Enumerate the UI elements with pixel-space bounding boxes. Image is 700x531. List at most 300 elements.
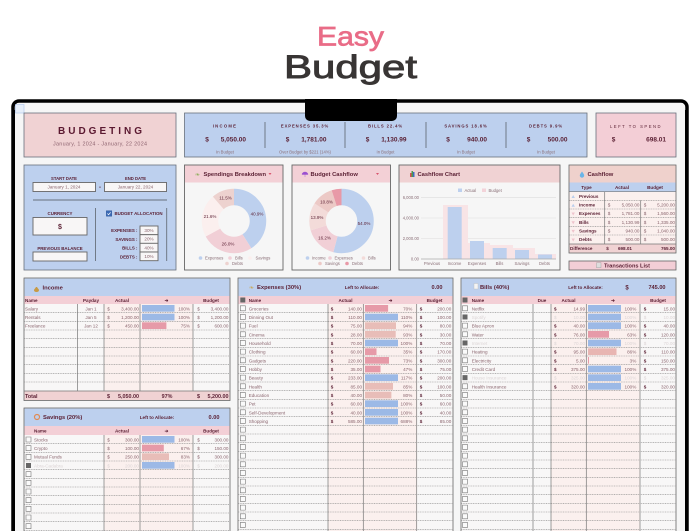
row: Dinning Out: 100.00 [437, 315, 452, 320]
total row: 5,050.00 [118, 394, 139, 400]
KPI: income: $ [205, 136, 209, 144]
KPI: debts: DEBTS 9.9% [529, 124, 563, 128]
row labels: Bills [579, 220, 589, 225]
row: Heating [472, 348, 675, 355]
row: Hobby: 75.00 [440, 367, 452, 372]
actual bars [448, 207, 552, 259]
legend [306, 256, 376, 266]
row: Freelance: 600.00 [214, 324, 229, 329]
column headers: Name [472, 298, 485, 303]
budget values: $ [644, 237, 647, 242]
actual values [608, 202, 640, 242]
row: Household: 70.00 [440, 341, 452, 346]
donut labels [311, 200, 370, 240]
row: Clothing: 35% [403, 350, 412, 355]
row: Salary: 3,400.00 [211, 306, 229, 311]
row: Health Insurance: 100% [625, 384, 636, 389]
row: Fuel: 80.00 [440, 324, 452, 329]
x axis [424, 261, 550, 266]
y axis: 0.00 [411, 256, 420, 262]
row: Heating: $ [644, 350, 647, 355]
panel: left to spend [596, 113, 676, 157]
column headers: ➔ [389, 298, 394, 303]
row: Stocks: $ [197, 437, 200, 442]
row: Water: $ [644, 332, 647, 337]
actual values: 940.00 [625, 228, 640, 234]
row: Mutual Funds: 250.00 [125, 455, 139, 460]
difference row: 698.01 [618, 246, 632, 251]
row: Health: $ [420, 384, 423, 389]
row: completed savings item: $ [197, 463, 200, 468]
legend: Bills [368, 256, 376, 260]
row: Groceries: Groceries [249, 306, 269, 311]
row: Hobby [249, 366, 452, 372]
actual values: 1,130.99 [622, 220, 640, 225]
row: Cinema: Cinema [249, 332, 265, 337]
column headers: ➔ [165, 298, 170, 303]
budget allocation: 10% [144, 254, 154, 259]
actual values: 500.00 [625, 237, 640, 242]
column headers [25, 298, 219, 303]
row: Fuel: 75.00 [350, 324, 362, 329]
table: expenses: Expenses (30%) [257, 285, 301, 291]
KPI: expenses: $ [286, 136, 290, 144]
KPI: income: INCOME [213, 124, 237, 128]
total row: 97% [162, 394, 173, 400]
KPI: expenses: 1,781.00 [301, 136, 327, 144]
row: Rentals: $ [107, 315, 110, 320]
row: Freelance [25, 322, 229, 329]
row: Health: 100.00 [437, 384, 452, 389]
row labels: Expenses [579, 211, 601, 216]
row: Household: Household [249, 341, 271, 346]
panel: spendings breakdown [184, 165, 283, 270]
row: Spotify (done): 10.00 [664, 315, 675, 320]
icon: money bag [34, 287, 39, 292]
panel: cashflow chart [399, 165, 560, 270]
row: Heating: 95.00 [574, 350, 585, 355]
y axis: 4,000.00 [403, 216, 420, 220]
row: Spotify (done): 100% [625, 315, 636, 320]
row: Gadgets: $ [420, 358, 423, 363]
row: Internet (done): $ [554, 341, 557, 346]
KPI: income: 5,050.00 [221, 136, 246, 144]
donut labels: 26.0% [222, 242, 234, 246]
row: Gadgets: $ [331, 358, 334, 363]
row: Hobby: Hobby [249, 367, 263, 372]
row: Dinning Out: 110.00 [348, 315, 362, 320]
budget values: $ [644, 228, 647, 234]
row: Electricity: $ [554, 358, 557, 363]
row: Credit Card: 100% [625, 367, 636, 372]
row: Stocks: Stocks [34, 437, 48, 442]
row: Blue Apron: 100% [625, 324, 636, 329]
column headers: ➔ [611, 298, 616, 303]
column headers: Actual [615, 185, 629, 190]
column headers: Actual [115, 429, 129, 434]
table: bills: 745.00 [648, 285, 666, 291]
row: Credit Card: $ [644, 367, 647, 372]
row: Crypto: $ [107, 446, 110, 451]
budget values: $ [644, 211, 647, 216]
row: Electricity: 5.00 [576, 358, 585, 363]
KPI: savings: SAVINGS 18.6% [444, 124, 488, 128]
row: Pet: 60.00 [350, 402, 362, 407]
row: Shopping: 585.00 [348, 419, 362, 424]
column headers: Budget [427, 298, 443, 303]
row: Netflix: 14.99 [574, 306, 585, 311]
row: Internet (done): 70.00 [574, 341, 585, 346]
row: Gadgets: 73% [403, 358, 412, 363]
row labels: Previous [579, 194, 599, 199]
KPI: bills: In Budget [377, 150, 395, 154]
row: Gadgets [249, 357, 452, 364]
row: Shopping: $ [420, 419, 423, 424]
table: savings: 0.00 [209, 415, 219, 421]
row: Internet (done): 100% [625, 341, 636, 346]
row: Netflix: Netflix [472, 306, 485, 311]
column headers: Payday [83, 298, 99, 303]
row: Clothing: 60.00 [350, 350, 362, 355]
row: Self-Development: 40.00 [350, 410, 362, 415]
difference row: Difference [570, 246, 593, 251]
row: Health: Health [249, 384, 262, 389]
row: Groceries [249, 305, 452, 312]
button: transactions list: Transactions List [604, 264, 650, 270]
donut labels [204, 196, 263, 246]
row: Mutual Funds: 300.00 [214, 455, 229, 460]
row: Mutual Funds: Mutual Funds [34, 455, 63, 460]
row: Health Insurance: 320.00 [571, 384, 585, 389]
budget allocation: DEBTS : [120, 254, 138, 259]
row: Internet (done): 70.00 [664, 341, 675, 346]
budget values: 500.00 [661, 237, 675, 242]
row: Education [249, 392, 452, 398]
row: Credit Card: 375.00 [571, 367, 585, 372]
KPI: bills: BILLS 22.4% [368, 124, 403, 128]
button: transactions list [569, 261, 676, 270]
row: Blue Apron: $ [644, 324, 647, 329]
donut labels: 21.6% [204, 214, 216, 219]
table: expenses [238, 278, 453, 531]
column headers: Name [249, 298, 262, 303]
actual values: $ [608, 211, 611, 216]
row: Rentals [25, 314, 229, 320]
row: House Insurance (done): $ [644, 376, 647, 381]
row: Groceries: $ [420, 306, 423, 311]
difference row [570, 246, 675, 251]
row: Crypto: 100.00 [125, 446, 139, 451]
icon: money wings: ❧ [249, 286, 254, 292]
title: Easy Budget: Easy [317, 22, 385, 52]
icon: bill [474, 284, 478, 289]
column headers: Budget [647, 185, 663, 190]
panel: cashflow chart: Cashflow Chart [418, 172, 460, 178]
difference row: $ [606, 246, 609, 251]
budget values: 5,200.00 [657, 202, 675, 208]
row: Stocks: 300.00 [214, 437, 229, 442]
row: Fuel: 94% [403, 324, 412, 329]
row labels: Savings [579, 228, 597, 234]
column headers: Name [34, 429, 47, 434]
row: Cinema: 93% [403, 332, 412, 337]
row: Cinema [249, 331, 452, 338]
row: House Insurance (done): 325.00 [661, 376, 675, 381]
row: Dinning Out [249, 314, 452, 320]
row: Water: $ [554, 332, 557, 337]
row: Hobby: $ [420, 367, 423, 372]
row: Health: 85% [403, 384, 412, 389]
panel: KPI summary [184, 113, 587, 157]
row labels: Debts [579, 237, 592, 242]
row: Spotify (done): 10.00 [574, 315, 585, 320]
budget allocation: 30% [144, 228, 154, 233]
row: Electricity: $ [644, 358, 647, 363]
row: Fuel: Fuel [249, 324, 258, 329]
row: Clothing: $ [420, 350, 423, 355]
row: Crypto: $ [197, 446, 200, 451]
KPI: income: In Budget [216, 150, 235, 154]
row: Water [472, 331, 675, 338]
row: Spotify (done): $ [644, 315, 647, 320]
legend: Debts [352, 261, 363, 266]
legend: Savings [325, 261, 340, 266]
row: Electricity: 150.00 [661, 358, 675, 363]
row: Education: 40.00 [350, 393, 362, 398]
row: Stocks: $ [107, 437, 110, 442]
row: Household: $ [331, 341, 334, 346]
row: Netflix [472, 305, 675, 312]
row: Heating: Heating [472, 350, 488, 355]
row: Rentals: Jan 5 [85, 315, 97, 320]
table: income: Income [42, 286, 64, 292]
row: Freelance: $ [197, 324, 200, 329]
row: Shopping: 85.00 [440, 419, 452, 424]
row: Groceries: 200.00 [437, 306, 452, 311]
KPI: expenses: EXPENSES 35.3% [281, 124, 329, 128]
x axis: Expenses [468, 261, 486, 266]
panel: budgeting title: BUDGETING [58, 126, 142, 137]
row: Crypto: 67% [181, 446, 190, 451]
row: Stocks: 100% [178, 437, 190, 442]
row: Crypto: 150.00 [214, 446, 229, 451]
row: completed savings item: 200.00 [214, 463, 229, 468]
row: Salary [25, 305, 229, 312]
row: Fuel: $ [420, 324, 423, 329]
KPI: expenses [279, 124, 332, 154]
title: Easy Budget: Budget [284, 49, 417, 85]
legend: Bills [235, 256, 243, 260]
column headers [34, 429, 219, 434]
row: Blue Apron [472, 322, 675, 329]
row: Fuel: $ [331, 324, 334, 329]
budget allocation: BILLS : [122, 246, 138, 251]
row: Household: $ [420, 341, 423, 346]
row: Water: 63% [627, 332, 636, 337]
legend: Debts [232, 261, 243, 266]
end date: January 22, 2024 [118, 184, 154, 190]
row: Household: 70.00 [350, 341, 362, 346]
icon: bar chart [410, 171, 414, 177]
row: Gadgets: 220.00 [348, 358, 362, 363]
KPI: debts: $ [527, 136, 531, 144]
start date: START DATE [51, 176, 77, 181]
row: Fuel [249, 322, 452, 329]
KPI: savings: $ [446, 136, 450, 144]
row: Dinning Out: 110% [401, 315, 412, 320]
donut labels: 16.2% [318, 236, 331, 240]
panel: spendings breakdown: Spendings Breakdown [204, 172, 266, 178]
donut chart: cashflow [318, 197, 366, 245]
row: Dinning Out: Dinning Out [249, 315, 274, 320]
row: Salary: Salary [25, 306, 39, 311]
row: Spotify (done) [462, 314, 675, 320]
row: Freelance: 450.00 [125, 324, 139, 329]
start date [33, 176, 96, 192]
row: Groceries: 140.00 [348, 306, 362, 311]
legend: Actual [464, 188, 476, 193]
column headers: Actual [338, 298, 353, 303]
row: Cinema: 28.00 [350, 332, 362, 337]
row: Beauty: $ [331, 376, 334, 381]
actual values: $ [608, 202, 611, 208]
y axis: 2,000.00 [403, 236, 420, 241]
panel: budget cashflow [292, 165, 390, 270]
column headers [581, 185, 663, 190]
legend: Income [312, 256, 326, 260]
KPI: savings [444, 124, 488, 154]
row: Pet: $ [420, 402, 423, 407]
row: Credit Card: 375.00 [661, 367, 675, 372]
row: Water: Water [472, 332, 484, 337]
budget allocation: 40% [144, 245, 154, 250]
row: Cinema: $ [420, 332, 423, 337]
row: Cinema: 30.00 [440, 332, 452, 337]
column headers: Actual [561, 298, 576, 303]
currency: $ [58, 224, 62, 231]
row: Credit Card [472, 366, 675, 372]
actual values: 1,781.00 [622, 211, 640, 216]
legend [199, 256, 270, 266]
row: Salary: $ [107, 306, 110, 311]
donut labels: 54.0% [358, 221, 370, 226]
row: Salary: Jan 1 [85, 306, 97, 311]
end date: END DATE [125, 176, 146, 181]
row: Crypto: Crypto [34, 446, 48, 451]
total row [25, 394, 229, 400]
row: Freelance: Jan 12 [84, 324, 98, 329]
row: Self-Development: $ [331, 410, 334, 415]
panel: budgeting title [24, 113, 176, 157]
KPI: debts [527, 124, 568, 154]
legend: Expenses [205, 256, 223, 260]
row: Clothing [249, 348, 452, 355]
row: Beauty: 200.00 [437, 376, 452, 381]
row: Gadgets: Gadgets [249, 358, 267, 363]
budget values [644, 202, 675, 242]
row: Internet (done): $ [644, 341, 647, 346]
row: Electricity: Electricity [472, 358, 492, 363]
row: Internet (done) [462, 340, 675, 346]
row: Electricity [472, 357, 675, 364]
row: Credit Card: $ [554, 367, 557, 372]
row: Groceries: 70% [403, 306, 412, 311]
row: Health: $ [331, 384, 334, 389]
budget allocation: 20% [144, 237, 154, 242]
donut labels: 11.5% [219, 196, 232, 200]
row: Clothing: $ [331, 350, 334, 355]
row: Dinning Out: $ [420, 315, 423, 320]
row: Hobby: $ [331, 367, 334, 372]
total row: 5,200.00 [208, 394, 229, 400]
table: savings [24, 408, 230, 531]
column headers: Type [581, 185, 592, 190]
row: Education: $ [331, 393, 334, 398]
row: Self-Development: $ [420, 410, 423, 415]
row: Stocks: 300.00 [125, 437, 139, 442]
icon: umbrella [302, 172, 308, 177]
row: Rentals: Rentals [25, 315, 41, 320]
row: Blue Apron: 40.00 [664, 324, 675, 329]
table: bills [461, 278, 676, 531]
row: Netflix: $ [554, 306, 557, 311]
row: Rentals: 1,200.00 [121, 315, 139, 320]
actual values: 5,050.00 [622, 202, 640, 208]
row: Hobby: 35.00 [350, 367, 362, 372]
row: Internet (done): Internet [472, 341, 488, 346]
budget allocation [106, 211, 163, 261]
KPI: bills: 1,130.99 [381, 136, 407, 144]
budget allocation: BUDGET ALLOCATION [114, 211, 163, 216]
row: Netflix: 100% [625, 306, 636, 311]
KPI: bills [366, 124, 407, 154]
total row: $ [107, 394, 110, 400]
table: savings: Savings (20%) [43, 415, 82, 421]
budget allocation: SAVINGS : [115, 237, 138, 242]
row: Clothing: 170.00 [437, 350, 452, 355]
table: bills: Left to Allocate: [568, 285, 603, 290]
row: Blue Apron: 40.00 [574, 324, 585, 329]
row: Clothing: Clothing [249, 350, 266, 355]
budget values: $ [644, 220, 647, 225]
row: Freelance: Freelance [25, 324, 46, 329]
end date [104, 176, 166, 192]
budget values: $ [644, 202, 647, 208]
budget values: 1,560.00 [657, 211, 675, 216]
row: Pet: 60.00 [440, 402, 452, 407]
row: Credit Card: Credit Card [472, 367, 496, 372]
row: Stocks [34, 436, 229, 443]
legend: Expenses [334, 256, 353, 260]
panel: left to spend: LEFT TO SPEND [610, 124, 662, 129]
row: Dinning Out: $ [331, 315, 334, 320]
KPI: expenses: Over Budget by $221 (14%) [279, 150, 332, 154]
row labels [579, 194, 601, 242]
panel: cashflow table [569, 165, 676, 253]
donut labels: 40.9% [251, 212, 263, 216]
column headers [240, 298, 443, 303]
row: Shopping: 688% [401, 419, 412, 424]
x axis: Savings [515, 261, 529, 266]
row: Mutual Funds: $ [107, 455, 110, 460]
start date: January 1, 2024 [48, 184, 81, 190]
row: Shopping [249, 418, 452, 424]
row: Beauty [249, 374, 452, 381]
column headers: Budget [650, 298, 666, 303]
column headers: Budget [203, 298, 219, 303]
legend [458, 188, 503, 193]
row: Spotify (done): Spotify [472, 315, 486, 320]
